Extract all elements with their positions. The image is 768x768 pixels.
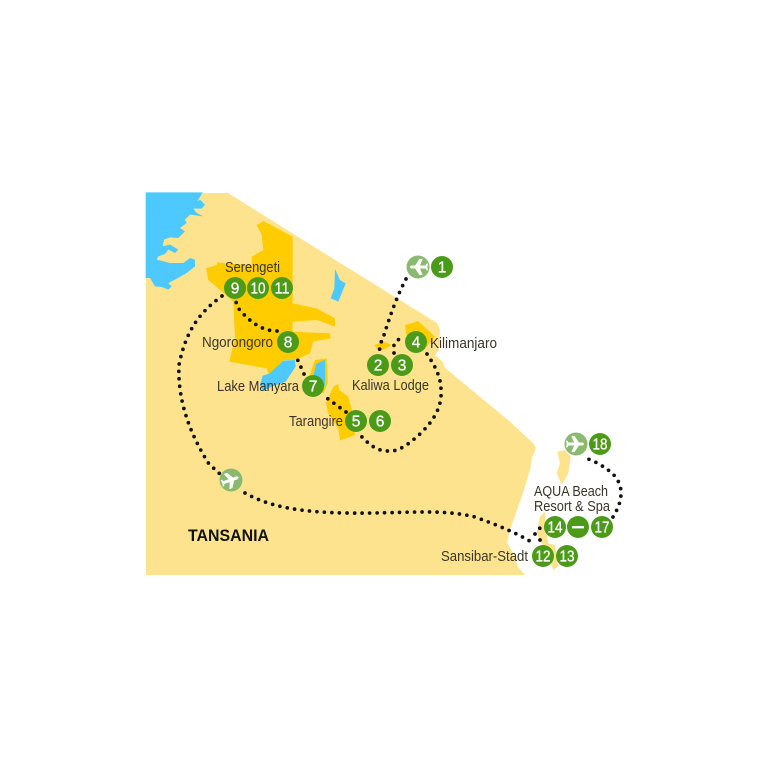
label: Kilimanjaro: Kilimanjaro [430,335,497,352]
icon: plane departure [406,256,430,278]
stop 10: 10 [250,280,266,298]
icon: plane domestic flight [219,468,242,492]
stop range dash [567,516,589,538]
stop 4: 4 [412,334,421,352]
stop 3: 3 [398,358,406,374]
label: Ngorongoro: Ngorongoro [202,334,273,351]
label: Serengeti: Serengeti [225,259,280,276]
map: Tanzania mainland [146,193,536,575]
stop 4 [405,331,427,353]
stop 9: 9 [231,280,239,298]
stop 18: 18 [592,436,608,454]
map: Tarangire park [326,384,355,441]
stop 8: 8 [284,334,292,352]
label: AQUA Beach Resort & Spa: Resort & Spa [534,498,611,515]
map: Kilimanjaro park [405,321,435,352]
map: Kaliwa area [374,342,392,351]
label: Kaliwa Lodge: Kaliwa Lodge [352,377,429,394]
map: Pemba island [557,450,571,485]
stop 3 [391,354,413,376]
label: TANSANIA: TANSANIA [188,526,269,545]
map: northern lake [331,269,346,302]
icon: plane return [564,432,588,456]
map: Lake Manyara [260,360,296,391]
stop 2 [367,354,389,376]
stop 11 [271,277,293,299]
map: Serengeti and Ngorongoro parks [206,221,335,373]
stop 6 [369,410,391,432]
stop 10 [247,277,269,299]
stop 7 [302,375,324,397]
map: Zanzibar island [537,512,558,570]
route: dotted travel line [179,279,621,543]
label: Sansibar-Stadt: Sansibar-Stadt [441,548,529,565]
map: Lake Manyara east water [313,360,325,387]
label: AQUA Beach Resort & Spa [534,483,611,515]
stop 11: 11 [274,280,290,298]
label: Lake Manyara: Lake Manyara [217,378,300,395]
stop 1 [431,256,453,278]
stop 14: 14 [548,520,563,536]
map: Lake Manyara park [309,358,328,393]
stop 7: 7 [309,378,317,396]
stop 9 [224,277,246,299]
stop 17: 17 [594,520,610,536]
stop 13: 13 [560,548,574,566]
stop 5: 5 [352,414,360,430]
stop 12: 12 [536,548,550,566]
label: AQUA Beach Resort & Spa: AQUA Beach [534,483,608,500]
stop 2: 2 [374,358,382,374]
stop 6: 6 [376,414,384,430]
stop 18 [589,433,611,455]
stop 14 [544,516,566,538]
stop 12 [532,545,554,567]
stop 13 [556,545,578,567]
stop 17 [591,516,613,538]
stop 8 [277,331,299,353]
label: Tarangire: Tarangire [289,413,343,430]
map: Lake Victoria [146,192,205,290]
stop 1: 1 [438,260,446,276]
stop 5 [345,410,367,432]
